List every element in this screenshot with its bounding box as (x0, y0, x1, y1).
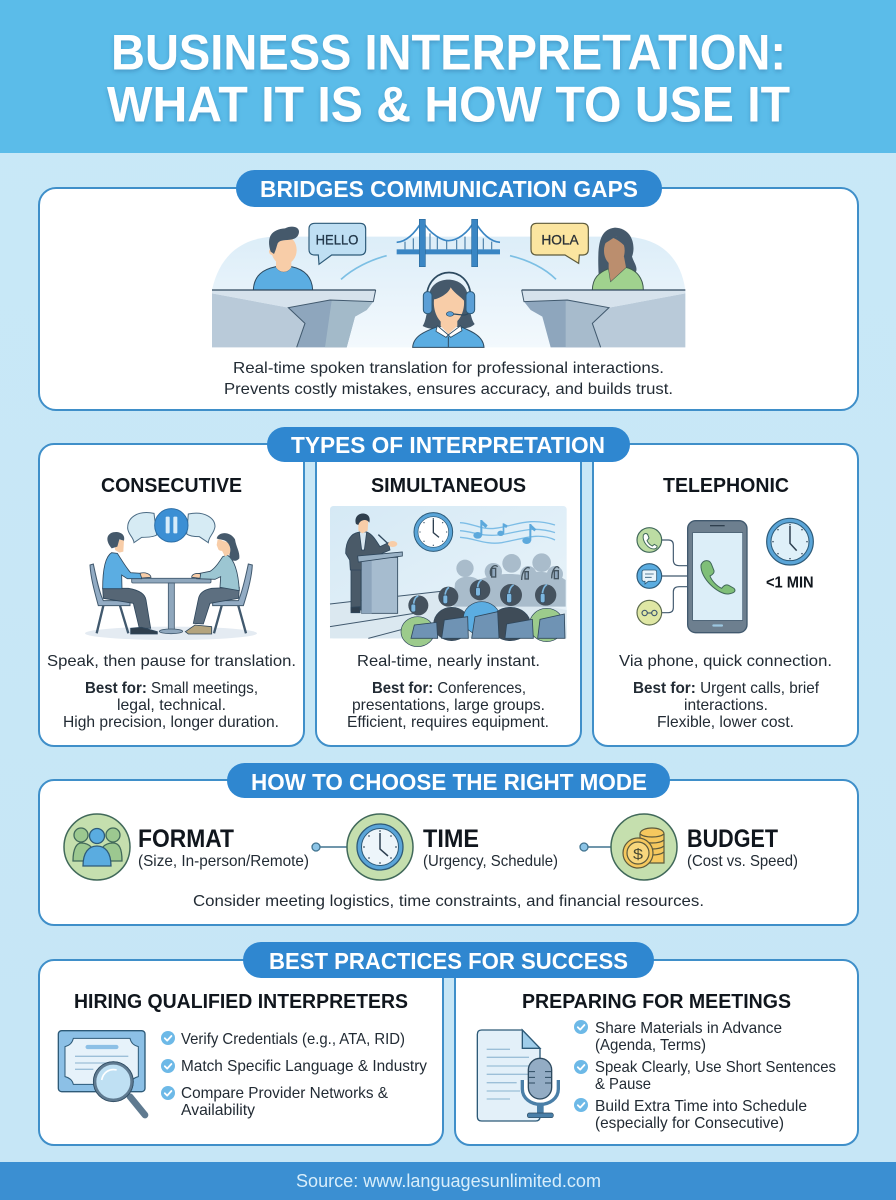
text: consecutive details: legal, technical. (117, 697, 226, 714)
label: format: (Size, In-person/Remote) (138, 853, 309, 870)
checklist: preparing: (especially for Consecutive) (595, 1115, 784, 1132)
back audience silhouettes (453, 553, 566, 607)
icon: budget coins (611, 814, 677, 880)
label: under 1 minute: <1 MIN (766, 575, 814, 592)
footer source bar: Source: www.languagesunlimited.com (296, 1171, 601, 1191)
text: consecutive details: Best for: Small meetings, (85, 680, 258, 697)
text: simultaneous details (347, 653, 549, 731)
icon: chat channel (637, 564, 662, 588)
floating headsets (490, 566, 559, 580)
panel: consecutive (39, 444, 304, 746)
title: WHAT IT IS & HOW TO USE IT (107, 76, 790, 132)
callout: HELLO: HELLO (316, 232, 358, 248)
header banner (0, 0, 896, 153)
heading: hiring: HIRING QUALIFIED INTERPRETERS (74, 991, 408, 1013)
icon: bridge (397, 219, 500, 267)
checklist: hiring: Match Specific Language & Industry (181, 1058, 427, 1075)
label: time: TIME (423, 825, 479, 853)
heading: best practices for success: BEST PRACTICES FOR SUCCESS (269, 948, 628, 974)
label: time (423, 825, 558, 870)
text: telephonic details (619, 653, 832, 731)
heading: bridges communication gaps (236, 170, 662, 207)
text: simultaneous details: presentations, large groups. (352, 697, 545, 714)
left person (103, 532, 157, 634)
connector: time to budget (580, 843, 612, 851)
text: simultaneous details: Best for: Conferences, (372, 680, 526, 697)
heading: types of interpretation: TYPES OF INTERPRETATION (291, 432, 605, 458)
icon: clock (414, 513, 453, 551)
panel: preparing for meetings (455, 960, 858, 1145)
icon: speaker at podium (346, 513, 402, 613)
text: consecutive details: High precision, longer duration. (63, 714, 279, 731)
panel: hiring qualified interpreters (39, 960, 443, 1145)
illustration: interpreter bridging two speakers (212, 219, 685, 347)
illustration: two people at a table with pause (85, 509, 257, 640)
text: telephonic details: Best for: Urgent calls, brief (633, 680, 820, 697)
checklist: preparing: Speak Clearly, Use Short Sentences (595, 1059, 836, 1076)
callout: HELLO (309, 223, 366, 264)
label: format: FORMAT (138, 825, 234, 853)
icon: budget coins: $ (633, 846, 644, 863)
icon: sound waves and music notes (460, 520, 555, 544)
checklist: hiring: Availability (181, 1102, 255, 1119)
icon: left speaker (253, 227, 313, 290)
icon: time clock (347, 814, 413, 880)
text: telephonic details: Flexible, lower cost. (657, 714, 794, 731)
panel: telephonic (593, 444, 858, 746)
label: time: (Urgency, Schedule) (423, 853, 558, 870)
heading: simultaneous: SIMULTANEOUS (371, 475, 526, 497)
icon: document with microphone (477, 1030, 558, 1121)
connectors (662, 540, 688, 613)
left chair (90, 564, 130, 633)
icon: call channel (637, 528, 662, 552)
panel: bridges communication gaps (39, 170, 858, 410)
caption: Consider meeting logistics, time constraints, and financial resources. (193, 893, 704, 910)
heading: types of interpretation (267, 427, 630, 462)
callout: HOLA (531, 223, 588, 263)
checklist: preparing (574, 1020, 836, 1132)
description text: Real-time spoken translation for professional interactions. (233, 360, 664, 377)
icon: right speaker (592, 228, 643, 290)
label: budget (687, 825, 798, 870)
checklist: preparing: Share Materials in Advance (595, 1020, 782, 1037)
title (107, 24, 790, 132)
callout: HOLA: HOLA (541, 232, 579, 248)
heading: preparing: PREPARING FOR MEETINGS (522, 991, 791, 1013)
right chair (213, 564, 252, 633)
text: consecutive details (47, 653, 296, 731)
text: simultaneous details: Efficient, requires equipment. (347, 714, 549, 731)
heading: best practices for success (243, 942, 654, 978)
description text (224, 360, 673, 398)
stage floor (330, 589, 567, 638)
text: simultaneous details: Real-time, nearly instant. (357, 653, 540, 670)
heading: how to choose (227, 763, 670, 798)
table (132, 578, 211, 634)
label: budget: (Cost vs. Speed) (687, 853, 798, 870)
label: format (138, 825, 309, 870)
checklist: preparing: Build Extra Time into Schedule (595, 1098, 807, 1115)
icon: format group (64, 814, 130, 880)
label: budget: BUDGET (687, 825, 778, 853)
heading: bridges communication gaps: BRIDGES COMMUNICATION GAPS (260, 176, 638, 202)
panel: simultaneous (316, 444, 581, 746)
arcs to interpreter (341, 256, 556, 279)
text: telephonic details: Via phone, quick connection. (619, 653, 832, 670)
icon: clock (767, 518, 813, 565)
right cliff (522, 290, 685, 347)
left cliff (212, 290, 376, 347)
description text: Prevents costly mistakes, ensures accuracy, and builds trust. (224, 381, 673, 398)
heading: telephonic: TELEPHONIC (663, 475, 789, 497)
checklist: hiring (161, 1031, 427, 1119)
checklist: preparing: (Agenda, Terms) (595, 1037, 706, 1054)
right person (185, 533, 239, 634)
heading: consecutive: CONSECUTIVE (101, 475, 242, 497)
checklist: preparing: & Pause (595, 1076, 651, 1093)
icon: certificate under magnifier (58, 1031, 145, 1115)
title: BUSINESS INTERPRETATION: (111, 24, 786, 80)
seated audience with headphones (401, 580, 565, 647)
text: telephonic details: interactions. (684, 697, 768, 714)
icon: phone (688, 521, 747, 633)
illustration: phone with channels (637, 518, 814, 633)
heading: how to choose: HOW TO CHOOSE THE RIGHT MODE (251, 769, 647, 795)
panel: how to choose the right mode (39, 763, 858, 925)
icon: link channel (637, 600, 662, 625)
checklist: hiring: Compare Provider Networks & (181, 1085, 388, 1102)
icon: interpreter with headset (413, 272, 484, 347)
checklist: hiring: Verify Credentials (e.g., ATA, RID) (181, 1031, 405, 1048)
illustration: conference hall with speaker (330, 506, 567, 647)
connector: format to time (312, 843, 348, 851)
text: consecutive details: Speak, then pause for translation. (47, 653, 296, 670)
footer source bar (0, 1162, 896, 1200)
